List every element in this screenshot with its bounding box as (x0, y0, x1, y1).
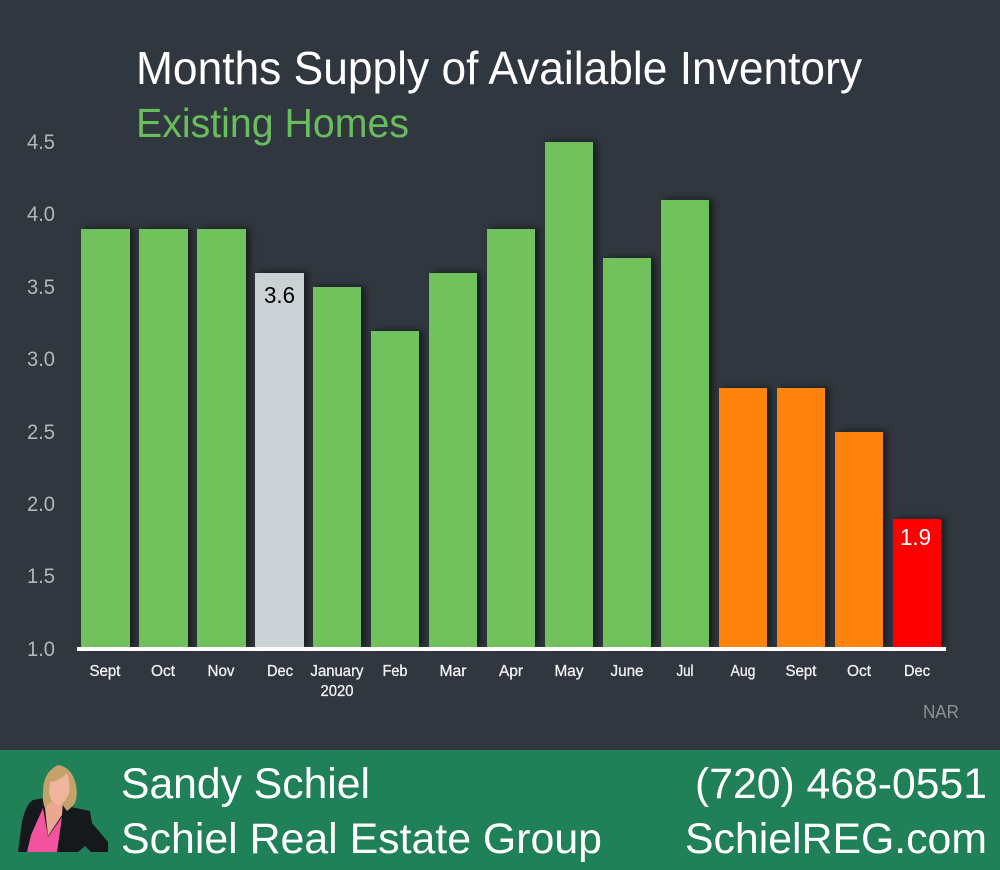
website: SchielREG.com (685, 815, 987, 863)
x axis labels: Apr (499, 663, 524, 680)
x axis labels: June (610, 663, 644, 680)
x axis labels: May (554, 663, 584, 680)
y axis labels: 4.0 (27, 203, 55, 226)
y axis labels (27, 131, 55, 661)
source label: NAR (923, 702, 959, 722)
y axis labels: 2.5 (27, 421, 55, 444)
bar chart (77, 142, 946, 651)
y axis labels: 4.5 (27, 131, 55, 154)
y axis labels: 2.0 (27, 493, 55, 516)
x axis labels: Sept (786, 663, 817, 680)
x axis labels: Sept (90, 663, 121, 680)
x axis labels: Nov (208, 663, 234, 680)
x axis labels: Dec (904, 663, 930, 680)
jacket (18, 798, 108, 852)
blouse (27, 808, 62, 852)
x axis labels: Oct (847, 663, 872, 680)
x axis labels: 2020 (320, 683, 354, 700)
y axis labels: 3.5 (27, 276, 55, 299)
x axis labels: Aug (730, 663, 756, 680)
icon: agent portrait (18, 765, 108, 852)
face (49, 773, 70, 805)
x axis labels: January (310, 663, 364, 680)
hair (43, 765, 77, 811)
x axis labels: Jul (676, 663, 694, 680)
phone number: (720) 468-0551 (695, 760, 987, 808)
company name: Schiel Real Estate Group (121, 815, 602, 863)
footer band (0, 750, 1000, 870)
x axis labels (90, 663, 930, 700)
subtitle: Existing Homes (136, 100, 409, 146)
y axis labels: 1.5 (27, 565, 55, 588)
value label: 3.6: 3.6 (264, 282, 295, 308)
x axis line (77, 647, 946, 651)
title: Months Supply of Available Inventory (136, 42, 862, 94)
bars (81, 142, 941, 648)
contact name: Sandy Schiel (121, 760, 370, 808)
neck (45, 798, 63, 836)
value label: 1.9: 1.9 (900, 524, 931, 550)
x axis labels: Oct (151, 663, 176, 680)
y axis labels: 3.0 (27, 348, 55, 371)
x axis labels: Feb (382, 663, 408, 680)
x axis labels: Dec (267, 663, 293, 680)
y axis labels: 1.0 (27, 638, 55, 661)
x axis labels: Mar (440, 663, 467, 680)
